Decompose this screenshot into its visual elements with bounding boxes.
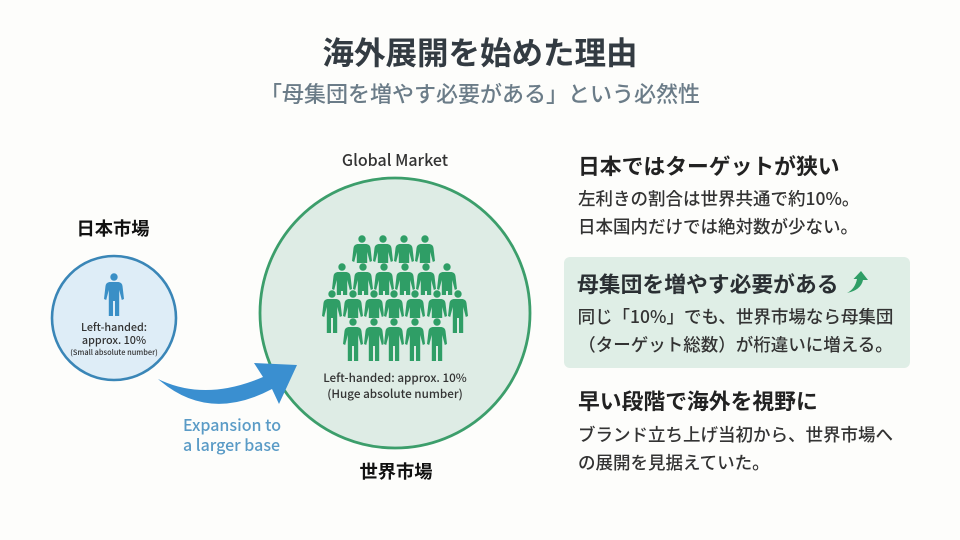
text: Japan circle caption [70, 319, 158, 358]
text: early overseas body: ブランド立ち上げ当初から、世界市場へ [578, 422, 893, 447]
text: Japan circle caption: Left-handed: [81, 319, 147, 335]
text: global circle caption: (Huge absolute number) [327, 385, 463, 402]
label: expansion: Expansion to [183, 412, 281, 436]
subtitle: 「母集団を増やす必要がある」という必然性 [260, 77, 700, 109]
panel: Japan market circle [52, 256, 176, 380]
text: need body [578, 304, 893, 356]
text: narrow target body [578, 186, 859, 238]
heading: narrow target: 日本ではターゲットが狭い [578, 150, 840, 181]
text: Japan circle caption: approx. 10% [82, 332, 146, 348]
panel: highlighted need [564, 257, 910, 368]
panel: narrow target [578, 150, 859, 238]
label: expansion [183, 412, 281, 456]
icon: single person [104, 273, 124, 316]
text: narrow target body: 左利きの割合は世界共通で約10%。 [578, 186, 859, 211]
text: global circle caption: Left-handed: approx. 10% [323, 369, 467, 386]
panel: early overseas [578, 385, 893, 474]
text: need body: 同じ「10%」でも、世界市場なら母集団 [578, 304, 893, 329]
text: narrow target body: 日本国内だけでは絶対数が少ない。 [578, 214, 858, 238]
panel: global market circle [260, 178, 530, 448]
label: Japan market: 日本市場 [76, 215, 150, 241]
label: world market: 世界市場 [359, 458, 433, 484]
title: 海外展開を始めた理由 [322, 28, 638, 74]
icon: crowd of people [322, 235, 468, 361]
text: early overseas body: の展開を見据えていた。 [578, 450, 770, 474]
heading: early overseas: 早い段階で海外を視野に [578, 385, 818, 416]
icon: up arrow [847, 271, 868, 293]
diagram: market comparison [50, 176, 532, 450]
text: Japan circle caption: (Small absolute number) [70, 347, 158, 358]
label: Global Market: Global Market [342, 147, 448, 171]
label: expansion: a larger base [183, 432, 280, 456]
text: global circle caption [323, 369, 467, 402]
text: need body: （ターゲット総数）が桁違いに増える。 [578, 332, 893, 356]
text: early overseas body [578, 422, 893, 474]
arrow: expansion [158, 363, 297, 404]
heading: need: 母集団を増やす必要がある [577, 268, 839, 299]
